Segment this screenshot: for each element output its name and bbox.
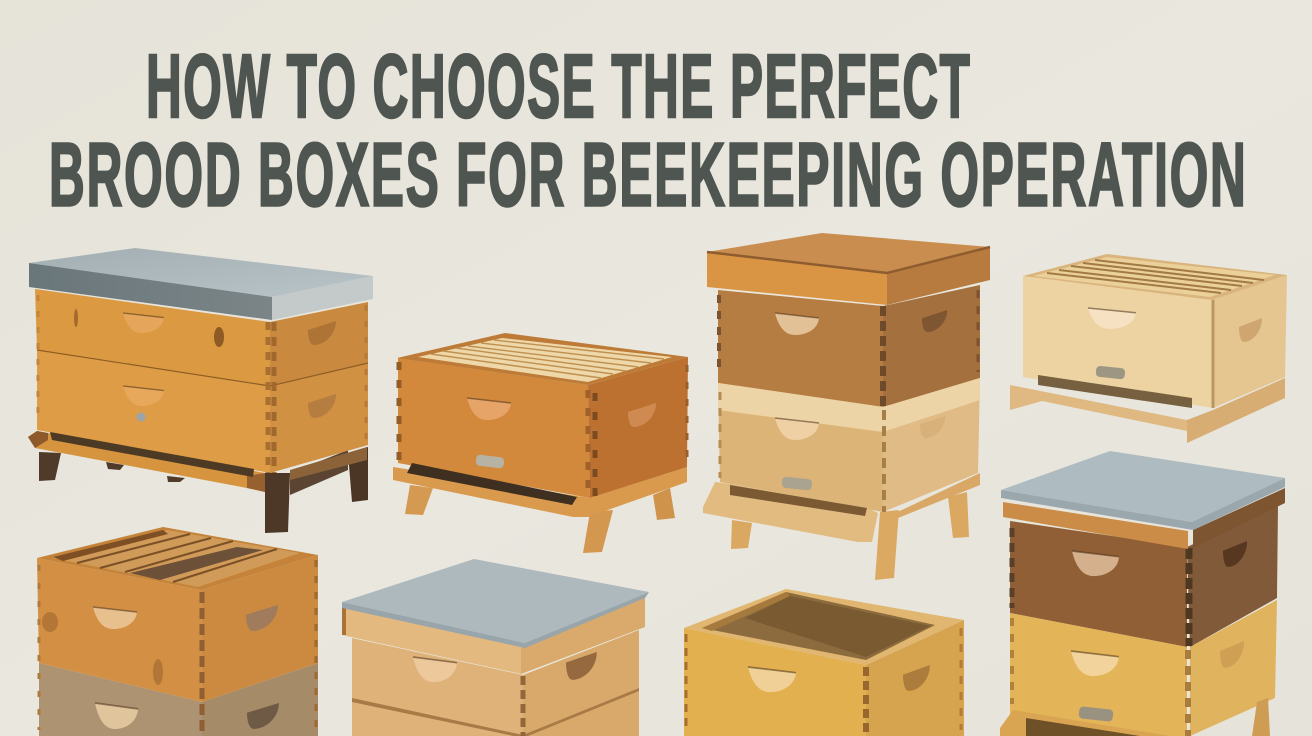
hive 5: bottom-left open box over grey-tan box	[37, 527, 318, 736]
title: BROOD BOXES FOR BEEKEEPING OPERATION	[49, 125, 1246, 225]
hive 1: metal roof, two orange boxes, dark legs	[28, 248, 373, 533]
hive 4: pale pine box on stand	[1010, 254, 1287, 443]
hive 3: tall hive with wooden roof	[703, 233, 990, 580]
hive 2: open orange box with frames on legs	[393, 333, 688, 553]
hive 6: bottom-centre box with metal roof	[342, 559, 649, 736]
title	[49, 36, 1246, 225]
hive 7: bottom yellow box with exposed comb	[684, 589, 964, 736]
hive 8: right stack with metal roof, dark and yellow boxes	[1000, 451, 1285, 736]
title: HOW TO CHOOSE THE PERFECT	[146, 36, 970, 137]
